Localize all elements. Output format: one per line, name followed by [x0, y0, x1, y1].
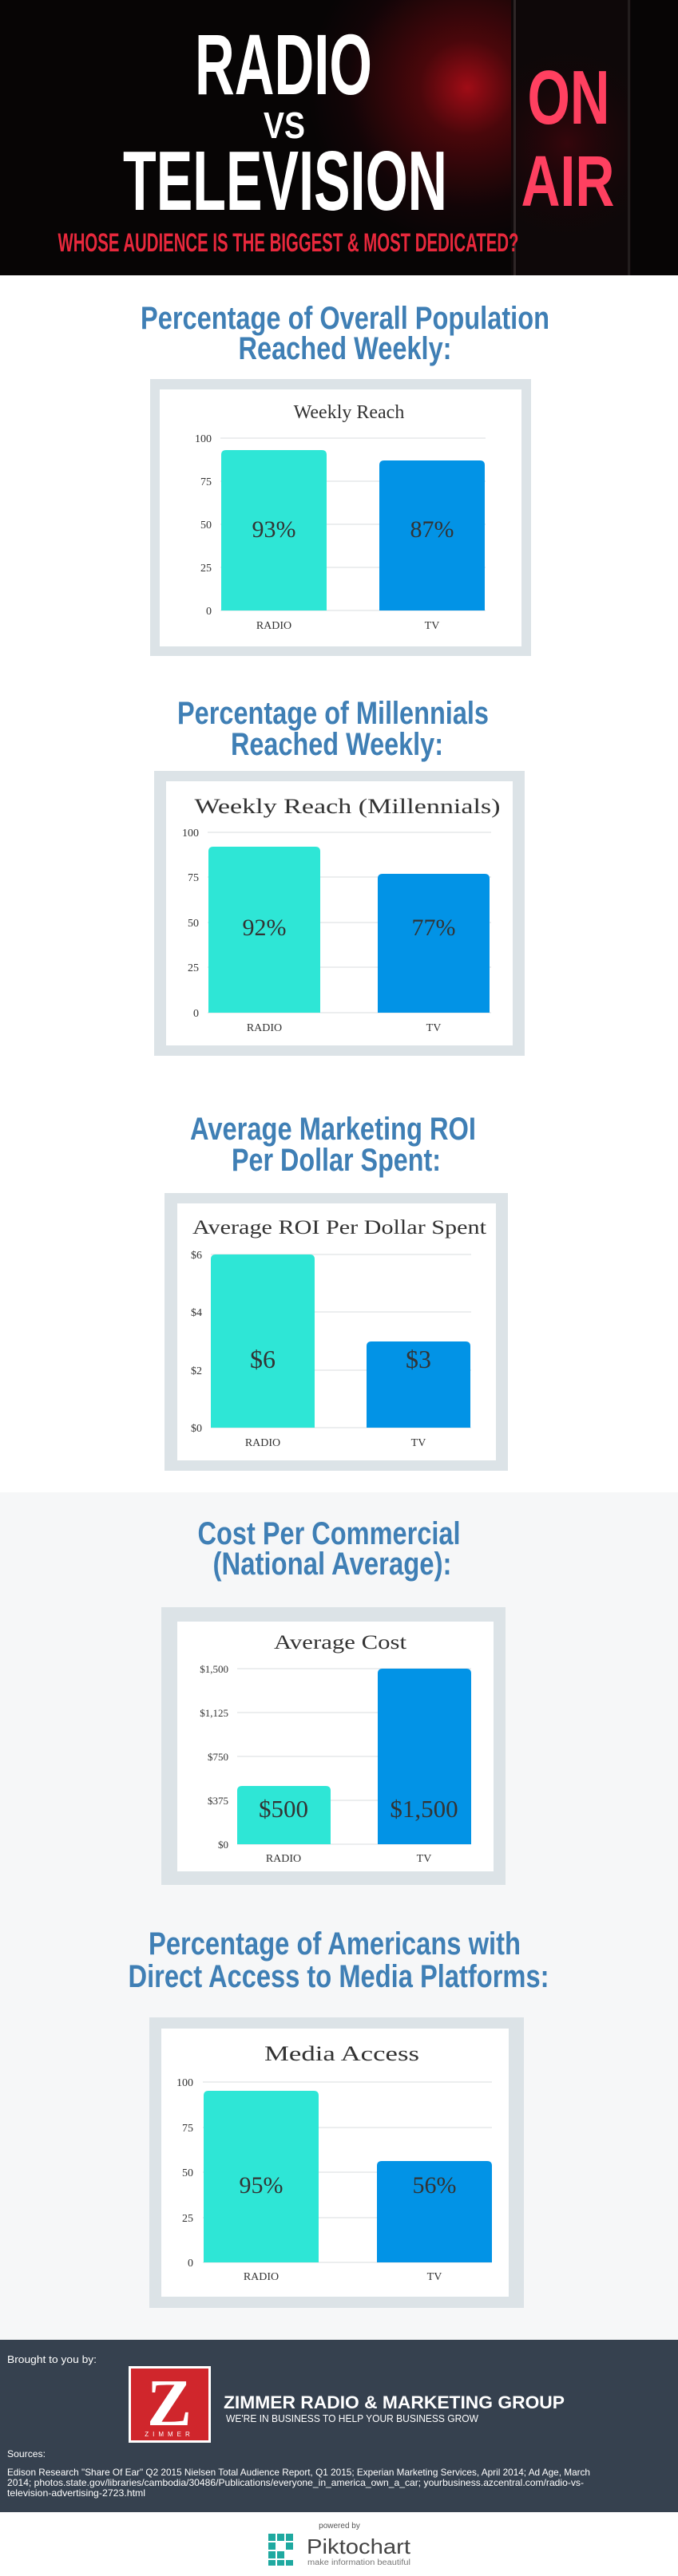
chart: Weekly Reach: [150, 379, 531, 656]
chart: Weekly Reach (Millennials): RADIO: [247, 1022, 282, 1034]
chart: Media Access: 95%: [240, 2172, 283, 2199]
chart: Weekly Reach (Millennials): 25: [188, 962, 199, 974]
heading: cost per commercial: [198, 1516, 460, 1582]
sources: [7, 2448, 590, 2499]
chart: Weekly Reach (Millennials): 75: [188, 872, 199, 884]
heading: millennials: Percentage of Millennials: [177, 696, 489, 731]
chart: Media Access: TV: [427, 2271, 442, 2283]
heading: population reached: Reached Weekly:: [238, 331, 452, 366]
chart: Weekly Reach (Millennials): 92%: [243, 915, 286, 941]
chart: Weekly Reach: RADIO: [256, 620, 291, 632]
chart: Weekly Reach (Millennials): [154, 771, 525, 1056]
chart: Media Access: 56%: [412, 2172, 457, 2199]
title: RADIO: RADIO: [195, 16, 372, 113]
sources: Edison Research "Share Of Ear" Q2 2015 Nielsen Total Audience Report, Q1 2015; Experian Marketing Services, April 2014; Ad Age, March: [7, 2467, 590, 2478]
logo: Zimmer: Z: [147, 2366, 192, 2440]
chart: Average Cost: $0: [218, 1839, 228, 1851]
heading: ROI: Average Marketing ROI: [190, 1112, 476, 1147]
sign: ON AIR: ON: [527, 55, 610, 140]
sources: 2014; photos.state.gov/libraries/cambodia/30486/Publications/everyone_in_america_own_a_car; yourbusiness.azcentral.com/radio-vs-: [7, 2477, 584, 2488]
chart: Average Cost: $1,125: [200, 1707, 228, 1719]
chart: Average Cost: $750: [208, 1751, 228, 1763]
sources: television-advertising-2723.html: [7, 2487, 145, 2499]
chart: Average Cost: $1,500: [200, 1663, 228, 1675]
chart: Average ROI: $0: [191, 1423, 202, 1435]
chart: Average Cost: RADIO: [266, 1853, 301, 1865]
chart: Media Access: Media Access: [264, 2042, 419, 2065]
header banner: [0, 0, 678, 275]
chart: Media Access: 75: [182, 2123, 193, 2135]
footer panel: [0, 2340, 678, 2512]
chart: Weekly Reach (Millennials): 0: [193, 1008, 199, 1020]
heading: media access: Direct Access to Media Platforms:: [128, 1959, 549, 1994]
powered by piktochart: [268, 2522, 411, 2567]
chart: Average ROI: RADIO: [245, 1437, 280, 1449]
chart: Weekly Reach: TV: [425, 620, 439, 632]
chart: Average ROI: $6: [250, 1345, 276, 1373]
chart: Average ROI: TV: [411, 1437, 426, 1449]
chart: Average Cost: [161, 1607, 506, 1885]
chart: Weekly Reach: 75: [200, 476, 212, 488]
chart: Average Cost: $1,500: [390, 1795, 458, 1823]
heading: millennials: [177, 696, 489, 762]
heading: media access: Percentage of Americans with: [149, 1926, 521, 1962]
chart: Weekly Reach: Weekly Reach: [294, 402, 404, 423]
chart: Average ROI: $2: [191, 1365, 202, 1377]
chart: Average ROI: Average ROI Per Dollar Spent: [192, 1217, 486, 1239]
chart: Weekly Reach (Millennials): TV: [426, 1022, 441, 1034]
chart: Average Cost: TV: [417, 1853, 431, 1865]
heading: media access: [128, 1926, 549, 1994]
powered by piktochart: powered by: [319, 2522, 360, 2531]
chart: Average Cost: $375: [208, 1795, 228, 1807]
heading: cost per commercial: (National Average):: [212, 1547, 452, 1582]
title: VS: VS: [264, 105, 305, 146]
chart: Media Access: 50: [182, 2167, 193, 2179]
heading: cost per commercial: Cost Per Commercial: [198, 1516, 460, 1551]
chart: Average ROI: [165, 1193, 508, 1471]
heading: population reached: Percentage of Overall Population: [141, 301, 549, 336]
chart: Media Access: 100: [176, 2077, 193, 2089]
chart: Weekly Reach (Millennials): Weekly Reach (Millennials): [195, 795, 500, 818]
heading: population reached: [141, 301, 549, 366]
chart: Weekly Reach: 0: [206, 606, 212, 618]
chart: Weekly Reach: 100: [195, 433, 212, 445]
chart: Weekly Reach (Millennials): 50: [188, 918, 199, 930]
heading: ROI: Per Dollar Spent:: [232, 1143, 441, 1178]
chart: Weekly Reach (Millennials): 100: [182, 828, 199, 840]
chart: Media Access: RADIO: [244, 2271, 279, 2283]
tagline: WE'RE IN BUSINESS TO HELP YOUR BUSINESS GROW: [226, 2412, 479, 2424]
logo: Zimmer: ZIMMER: [145, 2431, 194, 2438]
chart: Average ROI: $4: [191, 1307, 202, 1319]
sources: Sources:: [7, 2448, 46, 2459]
chart: Media Access: 25: [182, 2213, 193, 2225]
heading: ROI: [190, 1112, 476, 1178]
title: TELEVISION: TELEVISION: [123, 134, 447, 228]
chart: Average ROI: $3: [406, 1345, 431, 1373]
sign: ON AIR: [521, 55, 615, 222]
logo: Zimmer: [129, 2366, 211, 2443]
chart: Media Access: [149, 2017, 524, 2308]
chart: Average ROI: $6: [191, 1250, 202, 1262]
chart: Average Cost: Average Cost: [274, 1632, 406, 1653]
powered by piktochart: make information beautiful: [307, 2558, 410, 2567]
chart: Media Access: 0: [188, 2258, 193, 2270]
heading: millennials: Reached Weekly:: [231, 727, 443, 762]
chart: Weekly Reach (Millennials): 77%: [412, 915, 455, 941]
chart: Weekly Reach: 93%: [252, 516, 295, 543]
chart: Weekly Reach: 50: [200, 520, 212, 531]
powered by piktochart: Piktochart: [307, 2535, 411, 2558]
chart: Weekly Reach: 25: [200, 563, 212, 575]
company name: ZIMMER RADIO & MARKETING GROUP: [224, 2392, 565, 2412]
brought to you by: Brought to you by:: [7, 2353, 97, 2365]
sign: ON AIR: AIR: [521, 142, 615, 222]
chart: Average Cost: $500: [259, 1795, 308, 1823]
chart: Weekly Reach: 87%: [410, 516, 454, 543]
